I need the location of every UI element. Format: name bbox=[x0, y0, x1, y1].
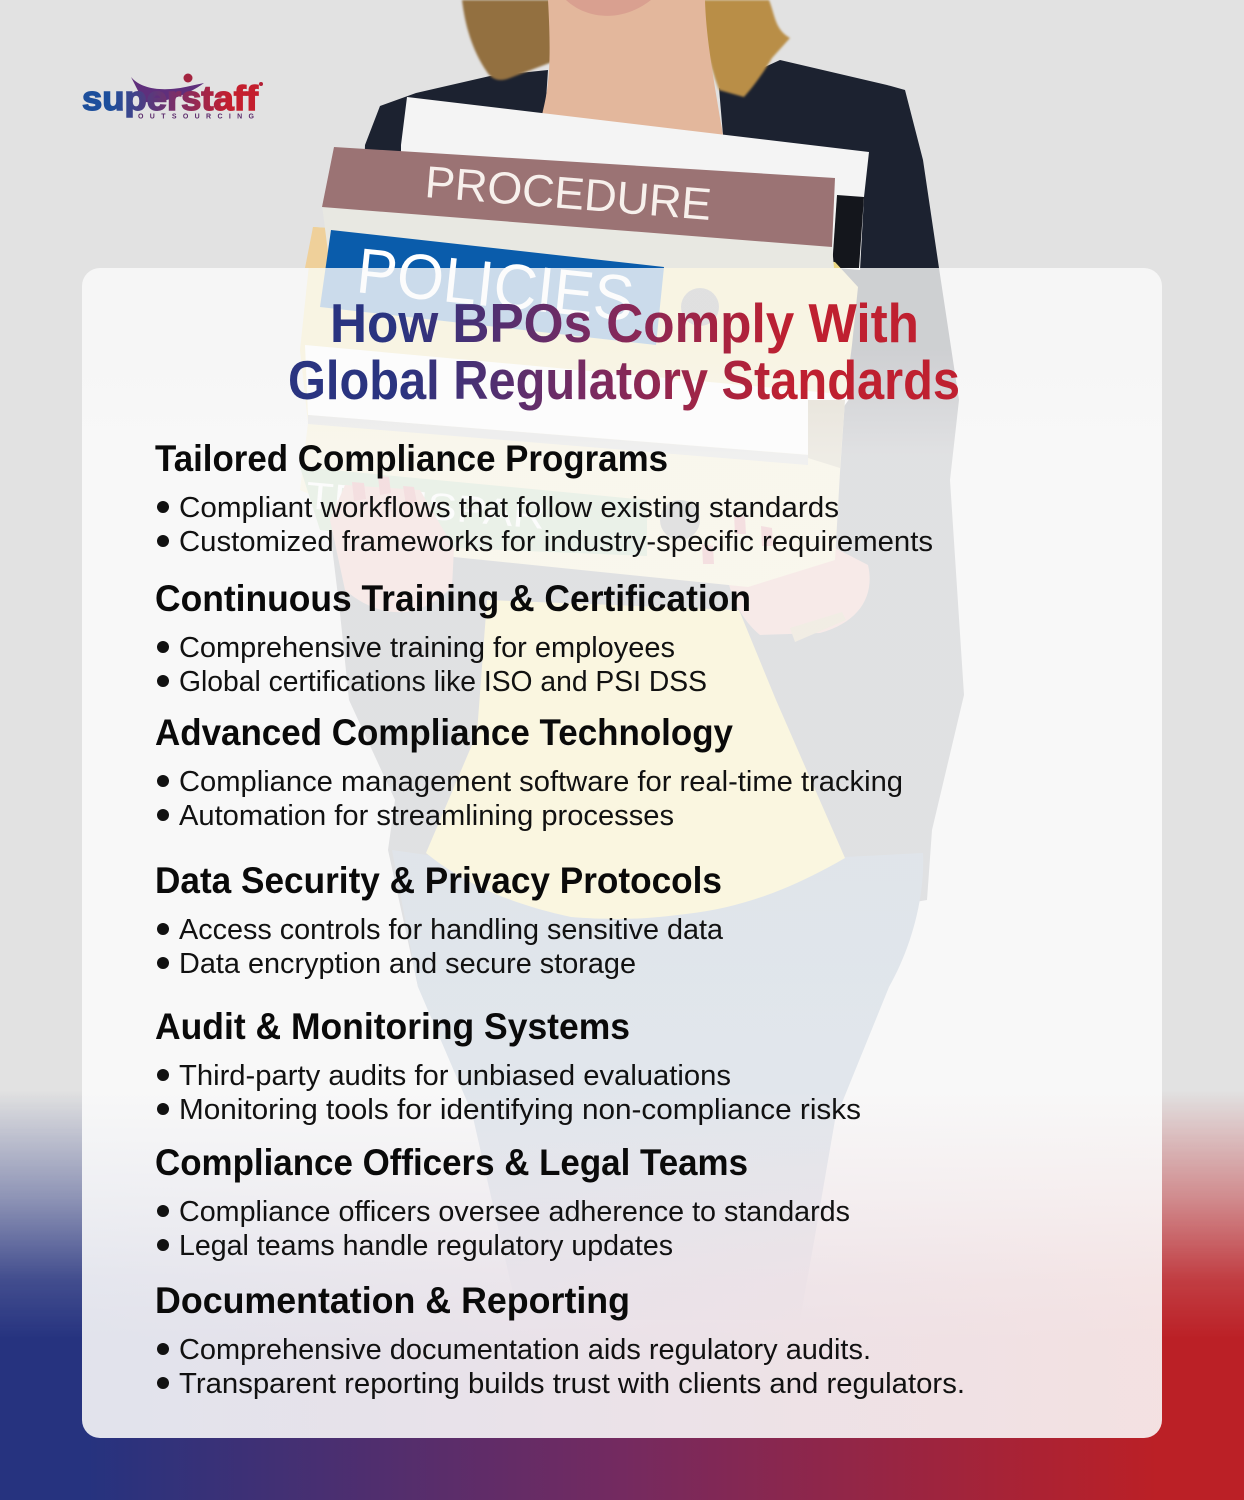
neck and chin bbox=[542, 0, 723, 135]
bullet list: Legal teams handle regulatory updates bbox=[179, 1230, 673, 1262]
black binder edge bbox=[832, 195, 864, 268]
section: tailored compliance programs bbox=[155, 438, 933, 558]
binder shadow bbox=[308, 415, 808, 465]
section: advanced compliance technology bbox=[155, 712, 903, 832]
heading: Compliance Officers & Legal Teams bbox=[155, 1142, 748, 1183]
policies word: POLICIES bbox=[354, 234, 638, 335]
watch bbox=[790, 612, 846, 642]
yellow top bbox=[426, 600, 845, 919]
section: continuous training and certification bbox=[155, 578, 751, 698]
logo tagline: OUTSOURCING bbox=[138, 114, 255, 120]
bullet list: Data encryption and secure storage bbox=[179, 948, 636, 980]
logo dot bbox=[184, 74, 192, 82]
binder hole top bbox=[681, 288, 719, 326]
bullet list bbox=[157, 1334, 965, 1400]
bullet list: Compliance management software for real-time tracking bbox=[179, 766, 903, 798]
left hand bbox=[330, 485, 454, 612]
bullet list: Third-party audits for unbiased evaluations bbox=[179, 1060, 731, 1092]
bottom colour gradient bbox=[0, 1100, 1244, 1500]
heading: Documentation & Reporting bbox=[155, 1280, 630, 1321]
heading: Data Security & Privacy Protocols bbox=[155, 860, 722, 901]
top white binder bbox=[401, 97, 869, 270]
binder hole bottom bbox=[660, 500, 700, 540]
bullet list bbox=[157, 1060, 861, 1126]
bullet list bbox=[157, 492, 933, 558]
section: data security and privacy protocols bbox=[155, 860, 724, 980]
section: compliance officers and legal teams bbox=[155, 1142, 850, 1262]
hair bbox=[462, 0, 552, 80]
bullet list: Transparent reporting builds trust with clients and regulators. bbox=[179, 1368, 965, 1400]
jacket bbox=[330, 60, 964, 987]
red nails bbox=[352, 476, 773, 564]
logo bbox=[82, 74, 263, 120]
bullet list bbox=[157, 1196, 850, 1262]
logo swoosh bbox=[131, 77, 204, 102]
logo wordmark: superstaff bbox=[82, 80, 259, 118]
tan binder corner bbox=[305, 227, 340, 268]
bottom binder word: TRANSPAR bbox=[304, 475, 547, 538]
heading: Advanced Compliance Technology bbox=[155, 712, 733, 753]
bullet list: Automation for streamlining processes bbox=[179, 800, 674, 832]
logo registered mark bbox=[259, 82, 263, 86]
section: documentation and reporting bbox=[155, 1280, 965, 1400]
heading: Audit & Monitoring Systems bbox=[155, 1006, 630, 1047]
bullet list: Monitoring tools for identifying non-compliance risks bbox=[179, 1094, 861, 1126]
jeans bbox=[392, 850, 923, 1320]
lips bbox=[566, 0, 651, 16]
bottom binder label bbox=[300, 467, 647, 556]
translucent content panel bbox=[82, 268, 1162, 1438]
bullet list: Comprehensive training for employees bbox=[179, 632, 675, 664]
heading: Continuous Training & Certification bbox=[155, 578, 751, 619]
title: How BPOs Comply With bbox=[330, 292, 919, 354]
white binder band bbox=[305, 345, 852, 455]
right hand bbox=[721, 520, 870, 635]
section: audit and monitoring systems bbox=[155, 1006, 861, 1126]
bullet list bbox=[157, 766, 903, 832]
bullet list: Access controls for handling sensitive data bbox=[179, 914, 724, 946]
photo: woman holding binders bbox=[300, 0, 964, 1320]
procedure word: PROCEDURE bbox=[423, 156, 713, 230]
second white binder bbox=[322, 205, 834, 268]
bullet list: Customized frameworks for industry-specific requirements bbox=[179, 526, 933, 558]
bullet list: Comprehensive documentation aids regulatory audits. bbox=[179, 1334, 871, 1366]
bullet list bbox=[157, 914, 724, 980]
title bbox=[288, 292, 960, 411]
procedure label bbox=[322, 147, 835, 247]
blue label bbox=[320, 230, 664, 345]
bullet list bbox=[157, 632, 707, 698]
title: Global Regulatory Standards bbox=[288, 349, 960, 411]
bullet list: Compliance officers oversee adherence to standards bbox=[179, 1196, 850, 1228]
cream binder bbox=[300, 227, 858, 587]
tan binder end bbox=[808, 400, 845, 468]
bullet list: Compliant workflows that follow existing standards bbox=[179, 492, 839, 524]
bullet list: Global certifications like ISO and PSI DSS bbox=[179, 666, 707, 698]
heading: Tailored Compliance Programs bbox=[155, 438, 668, 479]
